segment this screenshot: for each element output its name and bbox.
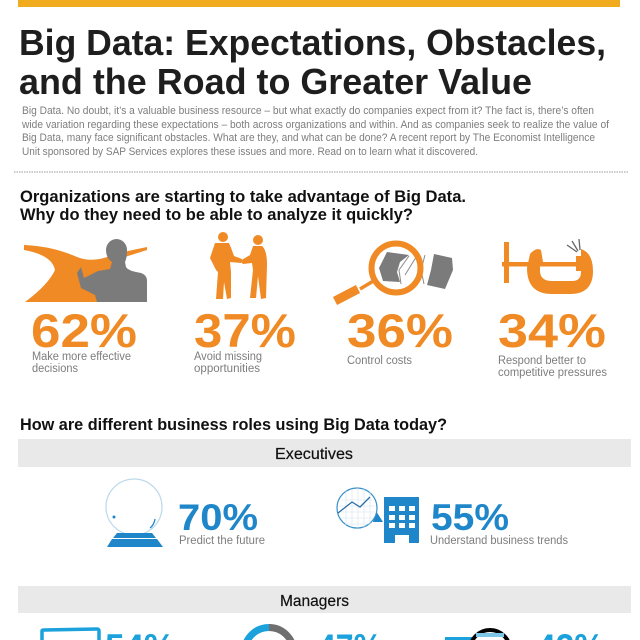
title: and the Road to Greater Value: [19, 61, 532, 102]
label: predict the future: Predict the future: [179, 535, 265, 547]
stat group: 47%: [244, 627, 382, 640]
stat: 34%: 34%: [498, 304, 606, 357]
label: make more effective decisions: Make more effective: [32, 351, 131, 363]
label: respond to competitive pressures: Respond better to: [498, 355, 586, 367]
heading: why analyze quickly: Organizations are starting to take advantage of Big Data.: [20, 187, 466, 206]
label: respond to competitive pressures: [498, 355, 607, 379]
panel: 55% business trends: [337, 488, 568, 547]
heading: business roles: How are different business roles using Big Data today?: [20, 415, 447, 434]
intro text: Unit sponsored by SAP Services explores these issues and more. Read on to learn what it discovered.: [22, 146, 478, 158]
section header: managers: [18, 586, 631, 613]
label: control costs: Control costs: [347, 355, 412, 367]
icon: monitor: [42, 629, 99, 640]
intro text: [21, 105, 610, 158]
icon: donut ring: [244, 628, 294, 640]
panel: 62% effective decisions: [24, 239, 147, 375]
stat group: 42%: [445, 628, 598, 640]
stat: 36%: 36%: [347, 304, 453, 357]
icon: crystal ball: [106, 479, 163, 547]
icon: handshake: [210, 232, 267, 299]
label: make more effective decisions: decisions: [32, 363, 78, 375]
section header: executives: Executives: [275, 446, 353, 463]
intro text: Big Data, many face significant obstacles. What are they, and what can be done? A recent report by The Economist Intelligence: [22, 132, 595, 144]
stat: 62%: 62%: [31, 304, 137, 357]
icon: magnifier: [445, 630, 510, 640]
section header: managers: Managers: [280, 593, 349, 610]
stat: 70%: 70%: [178, 497, 258, 538]
panel: 36% control costs: [335, 244, 453, 367]
heading: why analyze quickly: [20, 187, 466, 224]
intro text: wide variation regarding these expectations – both across organizations and within. And as companies seek to realize the value of: [21, 119, 610, 131]
label: respond to competitive pressures: competitive pressures: [498, 367, 607, 379]
label: avoid missing opportunities: Avoid missing: [194, 351, 262, 363]
icon: clamp: [502, 239, 593, 294]
panel: 37% missing opportunities: [194, 232, 296, 375]
stat: 37%: 37%: [194, 304, 296, 357]
icon: speaker and road: [24, 239, 147, 302]
panel: bottom managers row: [42, 627, 604, 640]
intro text: Big Data. No doubt, it’s a valuable business resource – but what exactly do companies expect from it? The fact is, there’s often: [22, 105, 594, 117]
stat: 55%: 55%: [431, 497, 509, 538]
title: [19, 22, 606, 102]
label: make more effective decisions: [32, 351, 131, 375]
panel: 70% predict the future: [106, 479, 265, 547]
label: understand business trends: Understand business trends: [430, 535, 568, 547]
stat group: 54%: [42, 627, 175, 640]
section header: executives: [18, 439, 631, 467]
heading: why analyze quickly: Why do they need to be able to analyze it quickly?: [20, 205, 413, 224]
label: avoid missing opportunities: [194, 351, 262, 375]
panel: 34% competitive pressures: [498, 239, 607, 379]
label: avoid missing opportunities: opportunities: [194, 363, 260, 375]
title: Big Data: Expectations, Obstacles,: [19, 22, 606, 63]
icon: magnifier over banknotes: [335, 244, 453, 301]
icon: chart and building: [337, 488, 419, 543]
